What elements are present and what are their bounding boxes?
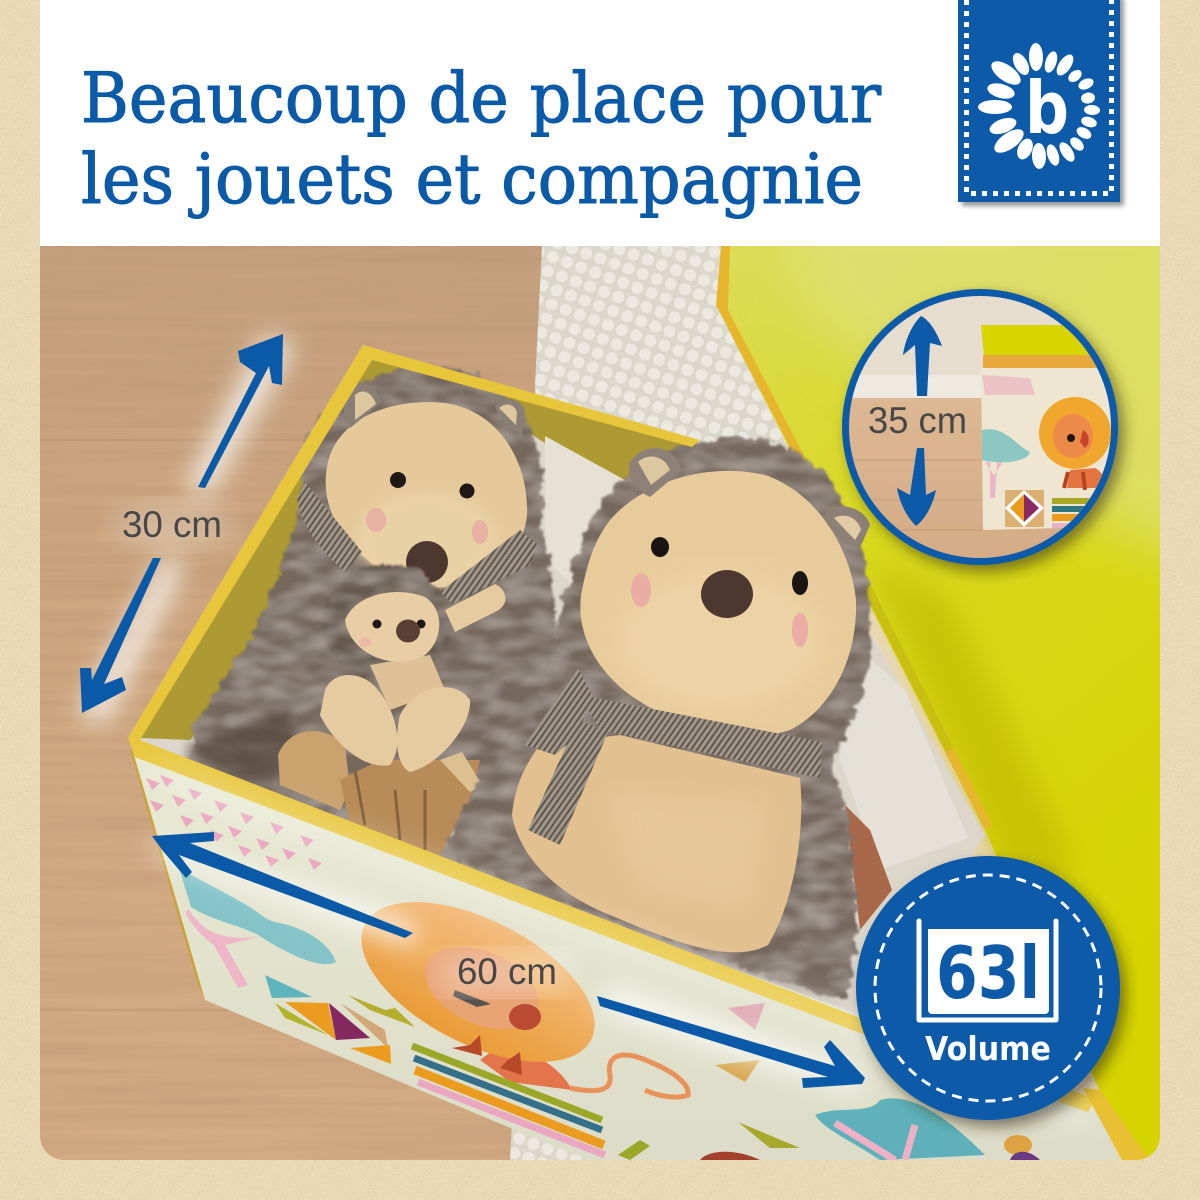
label: 60 cm: 60 cm: [457, 951, 557, 992]
arrow down: [80, 558, 161, 713]
baby hedgehog: [320, 564, 506, 772]
icon: flower logo: b: [1025, 66, 1069, 150]
baby arm and legs: [320, 584, 506, 772]
scarf: [525, 668, 822, 845]
mini tree: [982, 429, 1030, 462]
glow behind 60 cm label: [440, 950, 570, 995]
icon: container with volume: 63l: [936, 931, 1040, 1015]
title: [81, 59, 881, 220]
mother hedgehog: [190, 365, 555, 860]
mini lion: [1067, 468, 1104, 488]
nose: [701, 570, 753, 618]
label: Volume: Volume: [925, 1029, 1051, 1068]
fur body: [448, 439, 871, 1000]
box interior: [128, 345, 985, 1022]
title: les jouets et compagnie: [81, 140, 863, 220]
arrow up: [198, 334, 283, 488]
icon: flower logo: [978, 43, 1100, 169]
mini box: [981, 325, 1120, 530]
header panel: [40, 0, 1160, 246]
arrows: 30 cm dimension: [80, 334, 283, 713]
glow behind 30 cm label: [110, 501, 234, 549]
badge: 63 l volume: [856, 856, 1120, 1120]
arrow left: [152, 832, 413, 938]
cheeks: [366, 508, 386, 532]
box front panel: [128, 345, 1150, 1160]
pattern: stripes: [412, 1046, 605, 1155]
label: 30 cm: 30 cm: [122, 504, 222, 545]
logo tag: [958, 0, 1120, 202]
mini kite: [1005, 490, 1044, 527]
eyes: [651, 537, 669, 557]
arrow down: [897, 448, 936, 526]
pattern: right side decorations: [618, 1003, 1040, 1160]
yellow lid: [716, 246, 1160, 1160]
title: Beaucoup de place pour: [81, 59, 881, 139]
pattern: pink triangles: [146, 775, 322, 870]
lid corner edge: [1083, 1088, 1150, 1160]
feet: [278, 731, 482, 855]
inset circle: 35 cm height: [840, 285, 1120, 568]
rim: yellow fabric edge: [128, 345, 1095, 1112]
belly: [512, 735, 801, 952]
label: 35 cm: 35 cm: [868, 400, 967, 441]
pattern: lion: [361, 902, 691, 1100]
ears: [629, 448, 682, 497]
photo: box of plush hedgehogs: [40, 180, 1200, 1160]
face: [580, 448, 870, 736]
face: [326, 384, 527, 588]
mini stripes: [1052, 498, 1097, 504]
big hedgehog: [448, 439, 871, 1000]
baby face: [345, 592, 439, 662]
wood floor: [40, 246, 760, 1160]
arrows: 60 cm dimension: [152, 832, 865, 1088]
pattern: teal tree: [179, 868, 336, 988]
lid edge: [716, 246, 806, 460]
pattern: geometric kite: [265, 975, 415, 1064]
baby features: [359, 620, 426, 647]
stitched border: [966, 0, 1112, 194]
ears: [344, 384, 382, 428]
eyes: [390, 472, 406, 488]
white glow behind arrows: [78, 335, 860, 1095]
cheeks: [631, 573, 651, 607]
nose: [406, 541, 448, 583]
arrow up: [903, 316, 942, 396]
inset photo: [840, 285, 1120, 568]
white knit rug: [510, 246, 800, 1160]
scarf: [297, 482, 538, 604]
fur body: [190, 365, 555, 860]
arrow right: [597, 996, 865, 1088]
